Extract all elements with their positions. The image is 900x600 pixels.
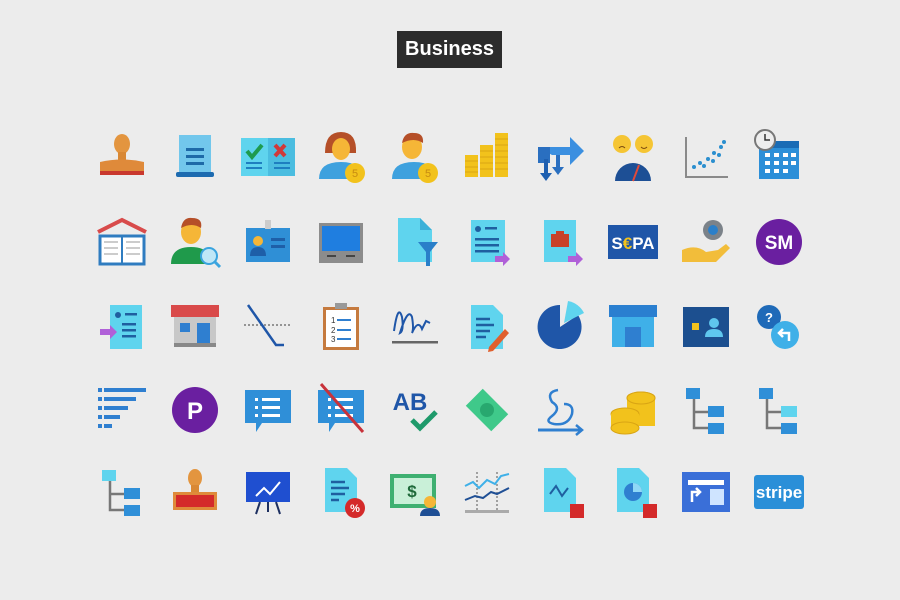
icon: coin stacks: [465, 133, 508, 177]
icon: resume import: [100, 305, 142, 349]
icon: funnel list: [98, 388, 146, 428]
icon: P badge: [172, 387, 218, 433]
icon: briefcase export: [544, 220, 583, 266]
icon: AB check: [393, 389, 436, 428]
icon: storefront: [609, 305, 657, 347]
icon: document percent: [325, 468, 365, 518]
icon: laptop screen: [319, 223, 363, 263]
icon: woman with coin: 5: [352, 168, 358, 180]
icon: red stamp: [173, 469, 217, 510]
icon: signature: [392, 312, 438, 344]
icon: open book check cross: [241, 138, 295, 176]
icon: hierarchy 1: [686, 388, 724, 434]
icon: scatter chart: [686, 137, 728, 177]
icon: id badge: [246, 220, 290, 262]
icon: chat list: [245, 390, 291, 432]
icon: coin stacks round: [611, 392, 655, 434]
icon: banknotes: [466, 389, 508, 431]
icon: payroll: [390, 474, 440, 516]
icon: split arrows: [538, 137, 584, 181]
icon: man with coin: 5: [425, 168, 431, 180]
icon: chat list crossed: [318, 384, 364, 432]
icon: trend line: [244, 305, 292, 345]
icon: document scroll: [176, 135, 214, 177]
icon: web page: [682, 472, 730, 512]
icon: stripe: [754, 475, 804, 509]
icon: SEPA: S€PA: [611, 234, 655, 253]
icon: clipboard list: 1: [331, 316, 336, 325]
icon: man with coin: [392, 133, 438, 183]
title: [397, 31, 502, 68]
icon: catalog book: [98, 220, 146, 264]
icon: person search: [171, 218, 220, 267]
icon: SEPA: [608, 225, 658, 259]
icon: clipboard list: [323, 303, 359, 350]
icon: pie chart: [538, 301, 584, 349]
icon: hierarchy 3: [102, 470, 140, 516]
icon: file chart: [544, 468, 584, 518]
icon: presentation chart: [246, 472, 290, 514]
icon: chat reply: ?: [765, 310, 773, 325]
icon: woman with coin: [319, 132, 365, 183]
icon: file filter: [398, 218, 438, 266]
icon: document edit: [471, 305, 509, 352]
icon: clipboard list: 2: [331, 326, 336, 335]
icon: file pie: [617, 468, 657, 518]
title: Business: [405, 38, 494, 60]
icon: hierarchy 2: [759, 388, 797, 434]
icon: SM badge: SM: [765, 233, 793, 254]
icon: hand gear: [682, 220, 730, 262]
icon: SM badge: [756, 219, 802, 265]
icon: clipboard list: 3: [331, 335, 336, 344]
icon: stripe: stripe: [756, 483, 802, 502]
icon: document percent: %: [350, 503, 360, 515]
icon: sprint loop: [538, 390, 582, 435]
icon: resume export: [471, 220, 510, 266]
icon: faces gauge: [613, 135, 653, 181]
icon: line chart: [465, 472, 509, 513]
icon: contact card: [683, 307, 729, 347]
icon: stamp: [100, 134, 144, 175]
icon: P badge: P: [187, 398, 203, 425]
icon: calendar clock: [755, 130, 799, 179]
icon: store: [171, 305, 219, 347]
icon: chat reply: [757, 305, 799, 349]
icon: AB check: AB: [393, 389, 427, 416]
icon: payroll: $: [407, 482, 417, 501]
